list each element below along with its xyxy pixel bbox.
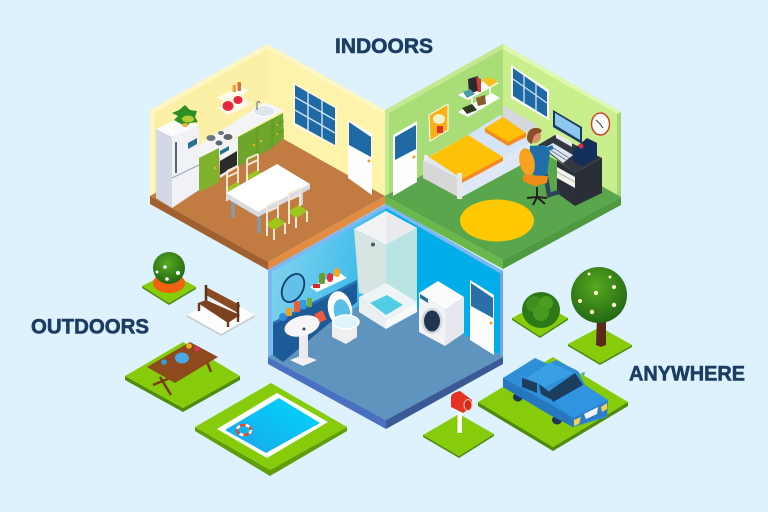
icon: mirror xyxy=(277,270,309,306)
toiletries on counter xyxy=(279,298,312,321)
panel: bathroom xyxy=(268,204,503,429)
panel: kitchen room xyxy=(150,44,385,270)
bed xyxy=(423,105,537,199)
bathroom floor xyxy=(268,290,503,429)
heading: outdoors: OUTDOORS xyxy=(31,316,149,338)
door xyxy=(393,121,417,196)
bedroom floor xyxy=(385,130,621,269)
kitchen walls xyxy=(150,44,385,196)
kitchen floor xyxy=(150,130,385,270)
icon: potted plant on fridge xyxy=(172,105,198,127)
dining chairs back xyxy=(225,154,266,205)
bedroom walls xyxy=(385,44,621,197)
item: blue car xyxy=(478,357,628,451)
dining table xyxy=(226,164,310,233)
panel: bedroom xyxy=(385,44,621,269)
washing machine xyxy=(419,281,464,346)
toilet xyxy=(325,289,359,344)
vanity counter xyxy=(273,280,357,362)
dining chairs front xyxy=(265,189,308,240)
item: picnic table xyxy=(125,342,240,412)
bathroom walls xyxy=(268,204,503,357)
door xyxy=(348,120,372,195)
shower cabin xyxy=(354,211,417,329)
counter and cabinets xyxy=(199,102,284,192)
rug xyxy=(460,200,534,242)
heading: anywhere: ANYWHERE xyxy=(629,362,745,386)
shelf with bottles xyxy=(310,268,347,292)
item: potted bush xyxy=(142,252,196,305)
door xyxy=(470,280,494,355)
wall shelves with bowls and bottles xyxy=(217,82,252,115)
item: swimming pool xyxy=(195,383,347,476)
window xyxy=(511,65,549,120)
item: flowering tree xyxy=(568,267,632,365)
item: park bench xyxy=(187,285,255,336)
icon: wall clock xyxy=(592,113,610,135)
item: mailbox xyxy=(423,391,494,458)
washbasin xyxy=(282,312,322,366)
fridge xyxy=(156,119,199,208)
icon: poster xyxy=(429,104,448,141)
bookshelves xyxy=(458,76,500,117)
title: indoors: INDOORS xyxy=(335,35,433,58)
window xyxy=(293,82,337,148)
item: shrub xyxy=(512,292,568,338)
person on orange chair xyxy=(517,128,559,205)
desk and computer xyxy=(538,110,602,206)
